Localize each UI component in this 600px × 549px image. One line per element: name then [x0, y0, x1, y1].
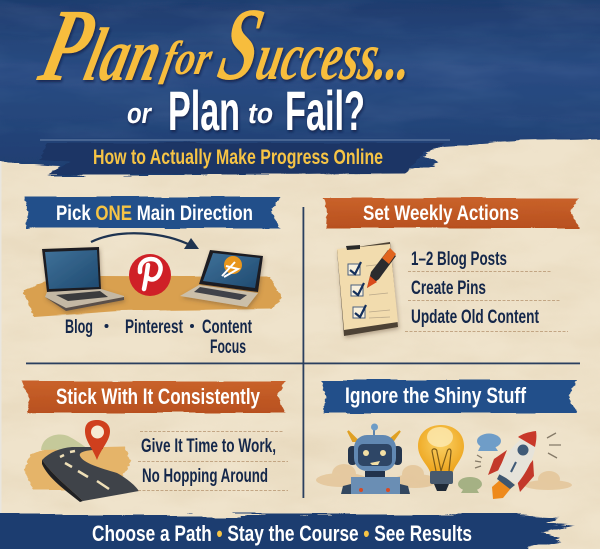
text: give it time: Give It Time to Work, — [141, 436, 276, 457]
title line 2: to — [248, 98, 273, 130]
banner: stick with it — [21, 381, 286, 413]
icon: left laptop — [42, 247, 124, 311]
icon: small green shape — [458, 477, 482, 493]
panel: pick one direction — [23, 197, 282, 358]
text: give it time: No Hopping Around — [142, 466, 268, 487]
label: Pinterest: Pinterest — [125, 317, 183, 338]
title line 2 — [127, 79, 365, 142]
text: give it time — [138, 432, 288, 490]
banner: pick one: Pick ONE Main Direction — [56, 202, 253, 225]
clouds — [316, 464, 572, 490]
orange brush stroke — [23, 276, 282, 317]
banner: weekly actions — [323, 198, 579, 228]
title — [30, 0, 427, 142]
checklist text: Update Old Content — [411, 307, 539, 328]
bullet — [104, 324, 108, 328]
bullet — [190, 324, 194, 328]
title line 1 — [30, 0, 427, 103]
label: Focus: Focus — [210, 337, 246, 358]
icon: Pinterest logo — [129, 254, 171, 296]
title line 2: or — [127, 98, 152, 130]
title line 1: for — [158, 32, 218, 85]
banner: ignore shiny stuff: Ignore the Shiny Stuff — [345, 383, 527, 408]
banner: weekly actions: Set Weekly Actions — [363, 202, 519, 225]
icon: right laptop — [180, 250, 263, 307]
vertical divider — [302, 207, 304, 498]
icon: light bulb — [418, 425, 464, 491]
footer band — [0, 515, 575, 549]
subtitle band: How to Actually Make Progress Online — [93, 146, 383, 169]
icon: road — [42, 447, 139, 502]
icon: clipboard with pen — [337, 242, 398, 336]
banner: ignore shiny stuff — [321, 380, 577, 413]
motion lines — [475, 433, 561, 468]
checklist text: 1–2 Blog Posts — [411, 249, 507, 270]
title line 2: Plan — [168, 79, 240, 142]
title line 2: Fail? — [285, 79, 365, 142]
banner: stick with it: Stick With It Consistently — [56, 384, 261, 409]
icon: rocket — [488, 431, 536, 499]
panel: ignore shiny stuff — [316, 380, 577, 499]
orange brush stroke — [24, 447, 131, 490]
green hill — [41, 435, 88, 450]
icon: robot — [341, 424, 410, 494]
label: Blog: Blog — [65, 317, 93, 338]
header: blue painted band — [0, 0, 600, 175]
icon: location pin — [85, 420, 110, 460]
arrow — [91, 233, 199, 249]
banner: pick one — [24, 197, 280, 228]
checklist text — [405, 249, 568, 332]
subtitle band — [40, 140, 450, 175]
checklist text: Create Pins — [411, 278, 486, 299]
panel: weekly actions — [323, 198, 579, 336]
label: Content: Content — [202, 317, 252, 338]
footer band: Choose a Path • Stay the Course • See Results — [92, 521, 472, 546]
horizontal divider — [26, 362, 580, 364]
panel: stick with it — [21, 381, 288, 502]
icon: small blue shape — [477, 434, 501, 451]
